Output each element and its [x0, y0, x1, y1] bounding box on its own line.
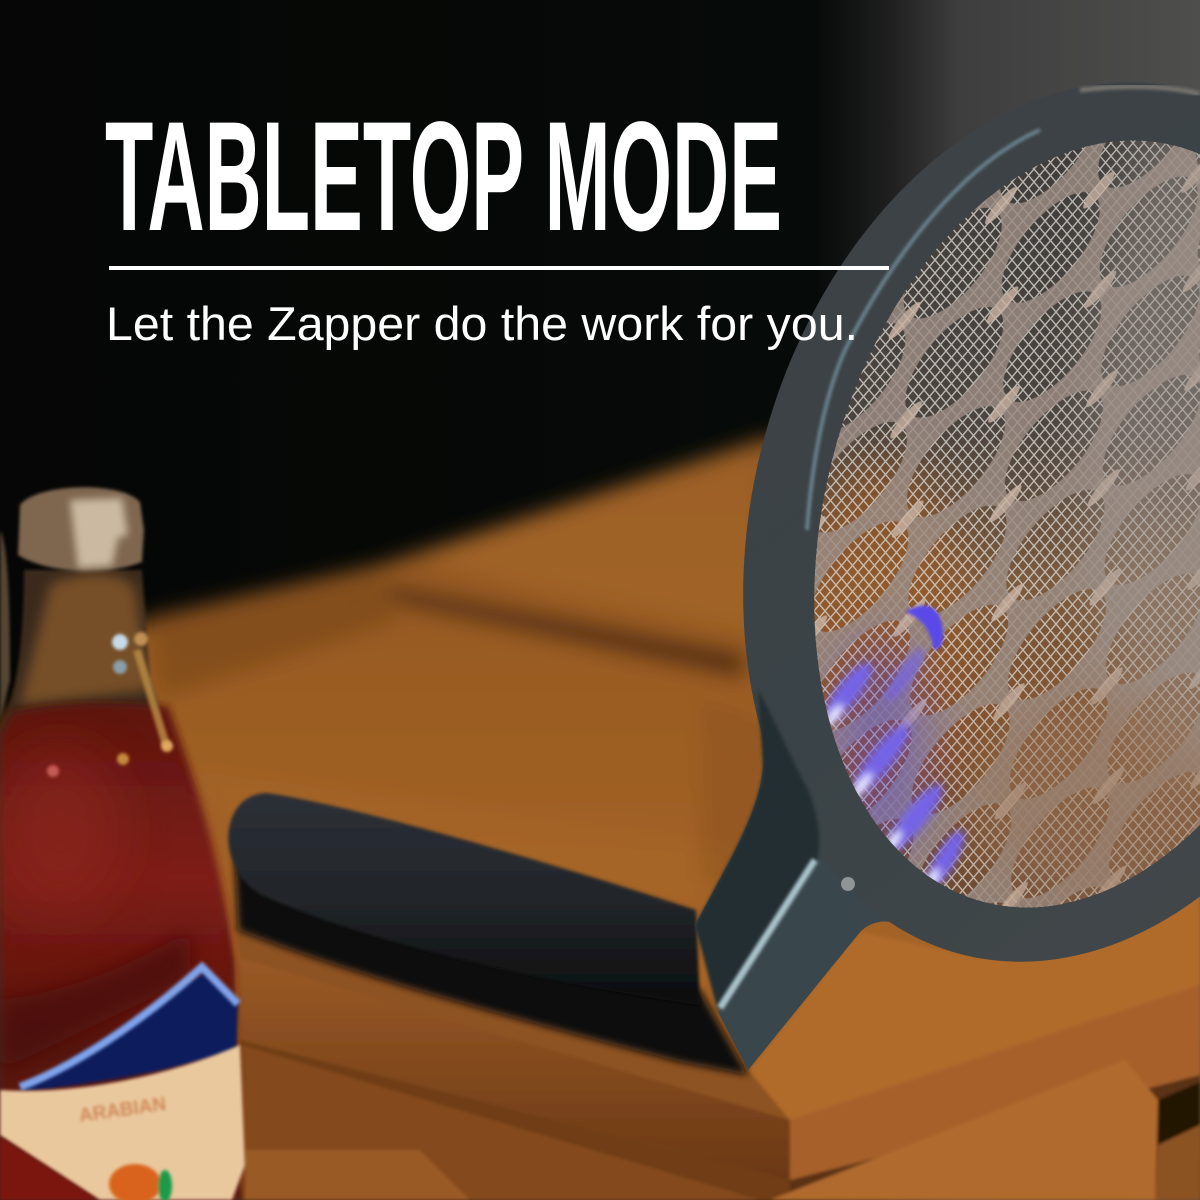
divider line	[109, 266, 889, 270]
wooden planks in foreground	[235, 885, 1200, 1200]
racket handle	[228, 793, 748, 1075]
neck ridge highlight	[720, 860, 815, 1008]
glass glare streak	[137, 650, 166, 745]
fruit illustration	[109, 1164, 172, 1200]
cap shine	[70, 498, 128, 568]
left edge bottle	[0, 530, 10, 720]
brighter red body	[0, 750, 120, 910]
racket neck	[695, 600, 985, 1070]
blue electric glow	[830, 640, 930, 860]
blurred lower right	[970, 690, 1200, 910]
wire mesh	[790, 120, 1200, 920]
glare dots	[47, 632, 173, 777]
blue blades	[817, 644, 971, 894]
lower red wrap	[0, 1138, 96, 1200]
neck lower facet	[718, 860, 860, 1070]
label lettering: ARABIAN	[78, 1094, 167, 1127]
mesh panel	[814, 140, 1200, 908]
subtitle: Let the Zapper do the work for you.	[106, 297, 858, 350]
blue arc	[905, 606, 943, 650]
handle body	[228, 793, 700, 1005]
soft out-of-focus haze on right	[1090, 110, 1200, 790]
soda bottle	[0, 487, 245, 1200]
white hot cores	[821, 701, 943, 895]
navy label	[20, 972, 238, 1092]
ring top rim light	[1080, 87, 1200, 94]
label blue stripe	[20, 967, 238, 1087]
lower warm wood seen through mesh	[790, 460, 970, 820]
red liquid	[0, 703, 240, 1200]
ring highlight	[807, 130, 1040, 530]
cream label	[0, 1045, 245, 1200]
outer ring	[648, 7, 1200, 1037]
table surface, blurred	[0, 438, 1200, 1200]
metal cap	[18, 487, 144, 571]
bottle glass	[0, 570, 240, 1200]
neck shaded facet	[695, 690, 819, 1012]
screw	[841, 877, 855, 891]
dark liquid band	[0, 930, 190, 1070]
amber shoulder glass	[20, 574, 150, 705]
handle shadow	[235, 860, 748, 1075]
plastic ribs with oblong holes	[790, 120, 1200, 920]
racket head and neck	[695, 82, 1200, 1070]
